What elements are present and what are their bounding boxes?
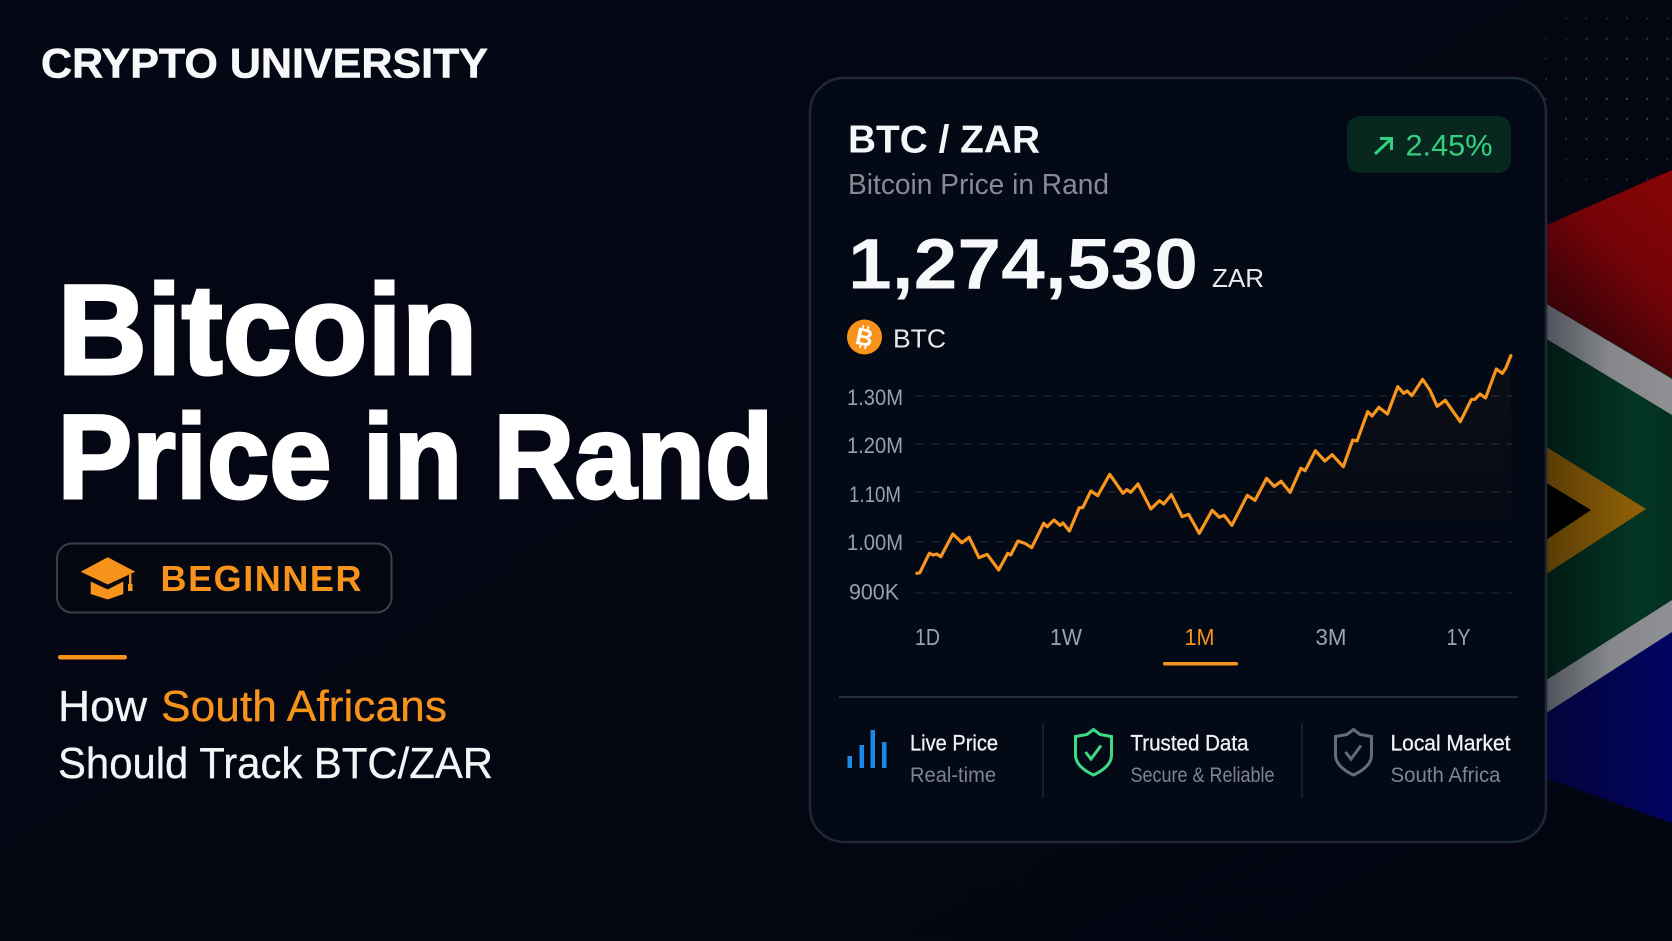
price value: 1,274,530: [848, 226, 1198, 304]
time range tabs: [915, 624, 1470, 666]
time range tabs: 1M: [1184, 624, 1214, 650]
dot pattern: [1524, 17, 1669, 200]
change value: 2.45%: [1406, 130, 1492, 162]
time range tabs: 3M: [1316, 624, 1346, 650]
time range tabs: 1W: [1050, 624, 1082, 650]
accent line: [58, 655, 127, 660]
subtitle: How: [58, 682, 147, 731]
y axis labels: 1.00M: [847, 530, 903, 555]
main title: [58, 259, 774, 524]
time range tabs: 1Y: [1446, 624, 1470, 650]
brand heading: CRYPTO UNIVERSITY: [41, 40, 488, 86]
feature: local market: [1336, 730, 1510, 787]
main title: Price in Rand: [58, 390, 774, 524]
icon: up arrow: [1375, 138, 1392, 154]
icon: gray shield: [1336, 730, 1372, 775]
feature: trusted data: Trusted Data: [1130, 730, 1249, 756]
icon: bars: [848, 730, 886, 768]
feature: local market: Local Market: [1390, 730, 1510, 756]
line chart: [847, 356, 1512, 604]
y axis labels: 1.20M: [847, 433, 903, 458]
subtitle: South Africans: [161, 682, 447, 731]
feature: local market: South Africa: [1390, 764, 1501, 787]
main title: Bitcoin: [58, 259, 478, 402]
feature: trusted data: Secure & Reliable: [1130, 764, 1274, 787]
feature: live price: Live Price: [910, 730, 998, 756]
coin label: BTC: [893, 324, 946, 354]
change pill: [1347, 116, 1511, 173]
feature: trusted data: [1076, 730, 1274, 787]
panel: price card: [810, 78, 1546, 842]
price line: [917, 356, 1511, 593]
y axis labels: 1.30M: [847, 385, 903, 410]
icon: bitcoin coin: B: [853, 323, 876, 353]
price unit: ZAR: [1212, 263, 1264, 293]
feature: live price: Real-time: [910, 764, 996, 787]
icon: bitcoin coin: [847, 320, 882, 354]
y axis labels: [847, 385, 903, 604]
South African flag: [1540, 170, 1672, 823]
y axis labels: 900K: [849, 580, 899, 604]
subtitle: [58, 682, 493, 788]
time range tabs: 1D: [915, 624, 940, 650]
y axis labels: 1.10M: [849, 482, 901, 507]
badge label: BEGINNER: [160, 558, 362, 599]
pair heading: BTC / ZAR: [848, 118, 1040, 162]
icon: graduation cap: [81, 557, 135, 600]
feature: live price: [848, 730, 998, 787]
badge: beginner: [57, 544, 392, 612]
subtitle: Should Track BTC/ZAR: [58, 739, 493, 788]
icon: green shield: [1076, 730, 1112, 775]
pair subtitle: Bitcoin Price in Rand: [848, 169, 1109, 201]
